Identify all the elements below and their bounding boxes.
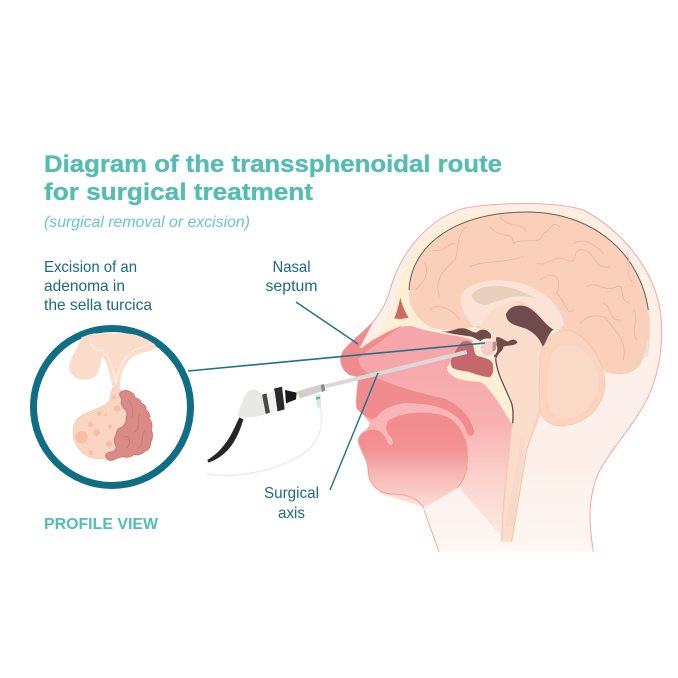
- label: excision of an adenoma: the sella turcica: [44, 297, 152, 314]
- pituitary in sella: [477, 338, 497, 358]
- label: surgical axis: [264, 485, 319, 522]
- title: Diagram of the transsphenoidal route: [44, 151, 502, 178]
- eyepiece body: [297, 384, 324, 398]
- shaft: [324, 352, 467, 387]
- label: surgical axis: Surgical: [264, 485, 319, 502]
- inner turbinate: [358, 331, 468, 374]
- spinal cord shading: [502, 410, 540, 542]
- brain: [409, 212, 649, 374]
- thalamus and brainstem: [480, 302, 553, 542]
- frontal sinus: [393, 297, 409, 320]
- pituitary illustration: [69, 333, 157, 460]
- head fill: [340, 204, 662, 552]
- title: for surgical treatment: [44, 179, 313, 206]
- ventricle: [506, 306, 553, 347]
- light post: [315, 394, 321, 408]
- label: surgical axis: axis: [278, 505, 305, 522]
- label: nasal septum: [266, 259, 318, 295]
- nasal bone: [359, 318, 417, 348]
- label: excision of an adenoma: Excision of an: [44, 259, 137, 276]
- leader line: nasal septum: [296, 302, 358, 344]
- label: nasal septum: Nasal: [272, 259, 310, 276]
- tongue and jaw: [358, 413, 468, 507]
- third ventricle and brainstem edge: [438, 328, 517, 358]
- label: excision of an adenoma: adenoma in: [44, 278, 125, 295]
- endoscope: [207, 352, 467, 475]
- label: profile view: PROFILE VIEW: [44, 516, 159, 533]
- leader line: circle to sella: [188, 343, 485, 371]
- corpus callosum: [461, 280, 564, 332]
- skull bone: [360, 210, 659, 423]
- camera head: [238, 390, 266, 417]
- infographic canvas: [30, 154, 662, 552]
- adenoma: [106, 390, 153, 460]
- camera cable: [207, 417, 243, 463]
- light cable: [207, 400, 322, 475]
- label: excision of an adenoma: [44, 259, 152, 314]
- brain folds: [415, 217, 637, 360]
- subtitle: (surgical removal or excision): [44, 214, 250, 231]
- hypothalamus stalk: [69, 333, 157, 388]
- circle ring: [34, 328, 190, 486]
- palate: [371, 404, 467, 446]
- gland spots: [75, 395, 121, 455]
- pituitary close-up circle: [34, 328, 190, 486]
- head outline: [343, 204, 662, 552]
- gland: [73, 388, 130, 459]
- head cross-section: [340, 204, 662, 552]
- nasal cavity: [343, 326, 512, 538]
- cerebellum: [539, 331, 605, 426]
- label: nasal septum: septum: [266, 278, 318, 295]
- title: [44, 151, 502, 206]
- nose tissue: [340, 322, 474, 436]
- leader line: surgical axis: [330, 373, 378, 490]
- sphenoid sinus: [451, 341, 493, 377]
- cream wedge behind sinus: [447, 341, 513, 425]
